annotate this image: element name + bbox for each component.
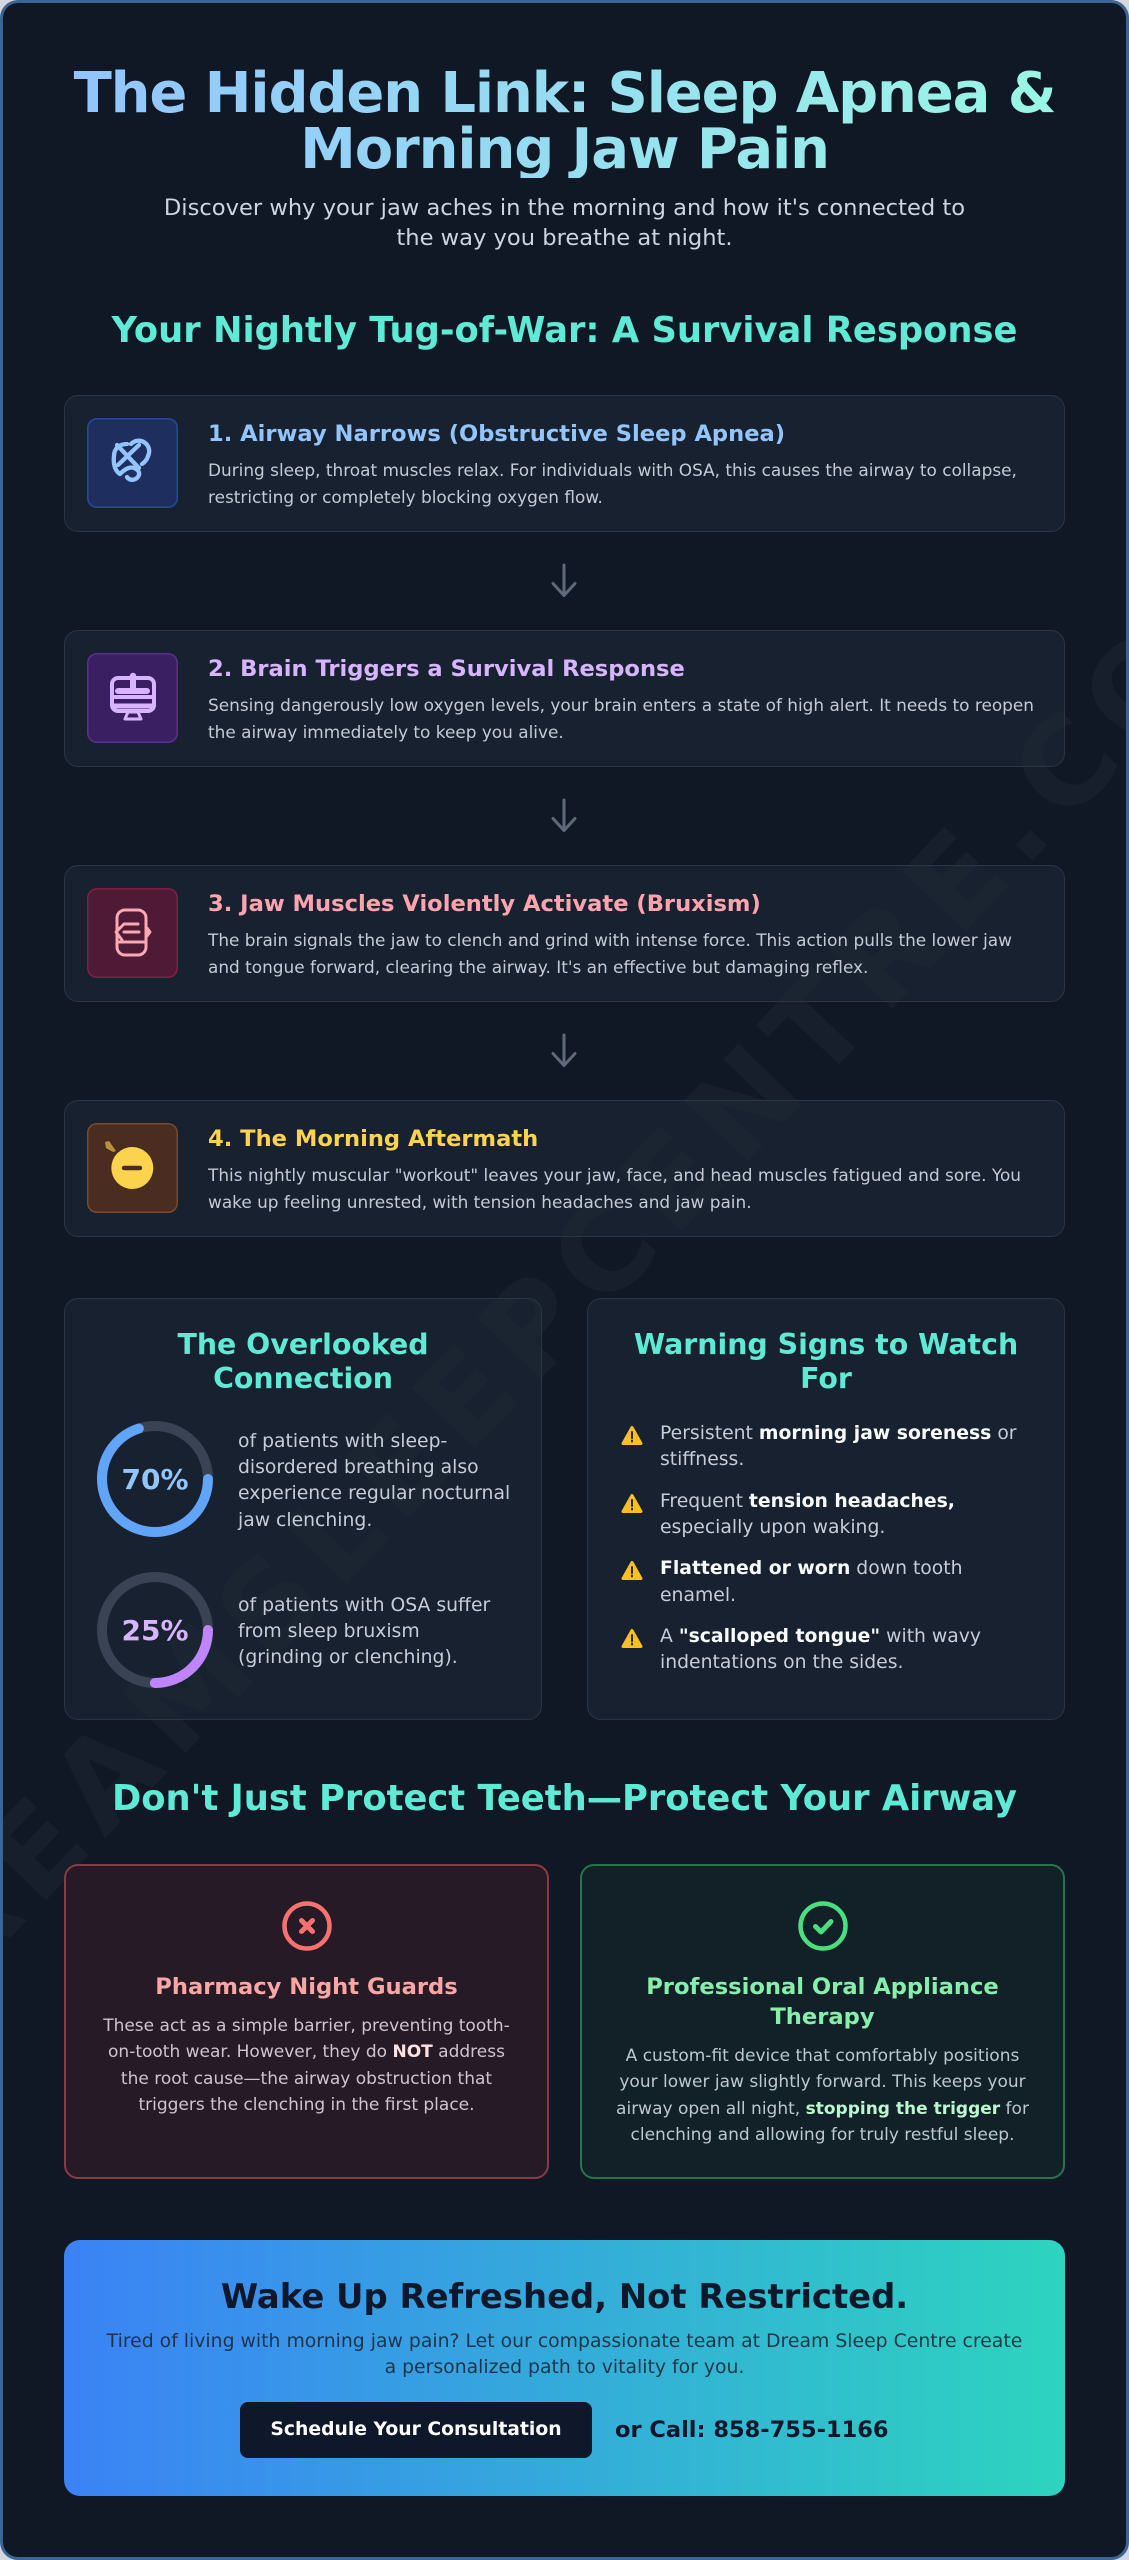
card text: airway open all night, stopping the trigger for (616, 2099, 1029, 2119)
card heading: Pharmacy Night Guards (155, 1974, 458, 2000)
warning item 1: stiffness. (660, 1449, 744, 1470)
icon: jaw (87, 888, 178, 978)
warning item 1: Persistent morning jaw soreness or (660, 1423, 1017, 1444)
CTA heading: Wake Up Refreshed, Not Restricted. (221, 2277, 908, 2316)
warning icon 2 (622, 1494, 643, 1513)
stat text 25 percent (238, 1594, 490, 1668)
step 1 text: During sleep, throat muscles relax. For individuals with OSA, this causes the airway to collapse, (208, 460, 1017, 480)
warning icon 3 (622, 1560, 643, 1580)
chart: 70 percent ring (97, 1421, 213, 1537)
card text: the root cause—the airway obstruction that (121, 2069, 492, 2089)
warning item 2: especially upon waking. (660, 1517, 885, 1538)
step 3 heading: 3. Jaw Muscles Violently Activate (Bruxism) (208, 891, 761, 917)
step 4 text: wake up feeling unrested, with tension headaches and jaw pain. (208, 1192, 752, 1212)
step 1 text: restricting or completely blocking oxygen flow. (208, 487, 603, 507)
stat text 25 percent: (grinding or clenching). (238, 1647, 458, 1668)
warning icon 4 (622, 1628, 643, 1648)
card heading (646, 1974, 999, 2030)
panel: professional oral appliance therapy (580, 1864, 1065, 2179)
panel: step 4 morning aftermath (64, 1100, 1065, 1237)
icon: pained face (87, 1123, 178, 1213)
warning item 2: Frequent tension headaches, (660, 1491, 955, 1512)
arrow 2 (552, 798, 576, 832)
stat text 70 percent: experience regular nocturnal (238, 1483, 510, 1504)
chart: 70 percent ring: 70% (121, 1463, 189, 1496)
card text: triggers the clenching in the first place. (138, 2095, 475, 2115)
panel: overlooked connection (64, 1298, 542, 1720)
card heading: Professional Oral Appliance (646, 1974, 999, 2000)
stat text 70 percent: jaw clenching. (238, 1510, 372, 1531)
CTA text (106, 2330, 1022, 2378)
step 2 heading: 2. Brain Triggers a Survival Response (208, 656, 685, 682)
step 3 text: and tongue forward, clearing the airway. It's an effective but damaging reflex. (208, 957, 868, 977)
step 3 text (208, 930, 1012, 977)
stat text 70 percent (238, 1430, 510, 1531)
button (240, 2402, 592, 2458)
step 1 text (208, 460, 1017, 507)
step 2 text: the airway immediately to keep you alive. (208, 722, 564, 742)
step 4 heading: 4. The Morning Aftermath (208, 1126, 538, 1152)
warning item 3: enamel. (660, 1585, 736, 1606)
card text: on-tooth wear. However, they do NOT address (108, 2042, 505, 2062)
card text: These act as a simple barrier, preventing tooth- (103, 2016, 510, 2036)
step 4 text (208, 1165, 1021, 1212)
stat text 70 percent: disordered breathing also (238, 1457, 479, 1478)
chart: 25 percent ring (97, 1572, 213, 1688)
step 3 text: The brain signals the jaw to clench and grind with intense force. This action pulls the lower jaw (208, 930, 1012, 950)
subtitle: Discover why your jaw aches in the morning and how it's connected to (164, 194, 965, 220)
title (0, 66, 1129, 178)
warning icon 1 (622, 1426, 643, 1445)
panel: step 3 jaw muscles (64, 865, 1065, 1002)
subtitle (164, 194, 965, 251)
panel: call to action (64, 2240, 1065, 2496)
warning item 4 (660, 1626, 981, 1673)
stat text 25 percent: from sleep bruxism (238, 1621, 420, 1642)
panel heading (634, 1328, 1018, 1395)
panel: pharmacy night guards (64, 1864, 549, 2179)
card text: A custom-fit device that comfortably positions (626, 2046, 1019, 2066)
icon: cross circle (282, 1901, 332, 1951)
stat text 25 percent: of patients with OSA suffer (238, 1594, 490, 1616)
panel heading: The Overlooked (177, 1328, 429, 1361)
heading: protect your airway: Don't Just Protect Teeth—Protect Your Airway (112, 1778, 1017, 1819)
phone number: or Call: 858-755-1166 (615, 2417, 889, 2443)
panel heading: Connection (213, 1362, 393, 1395)
panel heading: Warning Signs to Watch (634, 1328, 1018, 1361)
icon: monitor (87, 653, 178, 743)
arrow 1 (552, 564, 576, 598)
CTA text: a personalized path to vitality for you. (385, 2357, 744, 2378)
card text: clenching and allowing for truly restful sleep. (631, 2125, 1014, 2145)
card text (103, 2016, 510, 2115)
step 2 text: Sensing dangerously low oxygen levels, your brain enters a state of high alert. It needs to reopen (208, 695, 1034, 715)
warning item 4: indentations on the sides. (660, 1652, 904, 1673)
arrow 3 (552, 1034, 576, 1068)
subtitle: the way you breathe at night. (396, 225, 733, 251)
chart: 25 percent ring: 25% (121, 1614, 189, 1647)
heading: nightly tug-of-war: Your Nightly Tug-of-War: A Survival Response (112, 310, 1017, 351)
warning item 4: A "scalloped tongue" with wavy (660, 1626, 981, 1647)
step 4 text: This nightly muscular "workout" leaves your jaw, face, and head muscles fatigued and sore. You (208, 1165, 1021, 1185)
warning item 1 (660, 1423, 1017, 1470)
CTA text: Tired of living with morning jaw pain? Let our compassionate team at Dream Sleep Centre create (107, 2330, 1022, 2352)
warning item 3: Flattened or worn down tooth (660, 1558, 963, 1579)
step 2 text (208, 695, 1034, 742)
icon: airway (87, 418, 178, 508)
warning item 2 (660, 1491, 955, 1538)
title: Morning Jaw Pain (300, 117, 829, 182)
card heading: Therapy (770, 2004, 875, 2030)
card text: your lower jaw slightly forward. This keeps your (619, 2072, 1026, 2092)
icon: check circle (798, 1901, 848, 1951)
panel: step 1 airway narrows (64, 395, 1065, 532)
panel heading (177, 1328, 429, 1395)
stat text 70 percent: of patients with sleep- (238, 1430, 447, 1452)
panel: warning signs (587, 1298, 1065, 1720)
panel heading: For (800, 1362, 852, 1395)
step 1 heading: 1. Airway Narrows (Obstructive Sleep Apnea) (208, 421, 785, 447)
title: The Hidden Link: Sleep Apnea & (74, 60, 1055, 126)
warning item 3 (660, 1558, 963, 1606)
button: Schedule Your Consultation (270, 2419, 562, 2440)
panel: step 2 brain response (64, 630, 1065, 767)
card text (616, 2046, 1029, 2145)
